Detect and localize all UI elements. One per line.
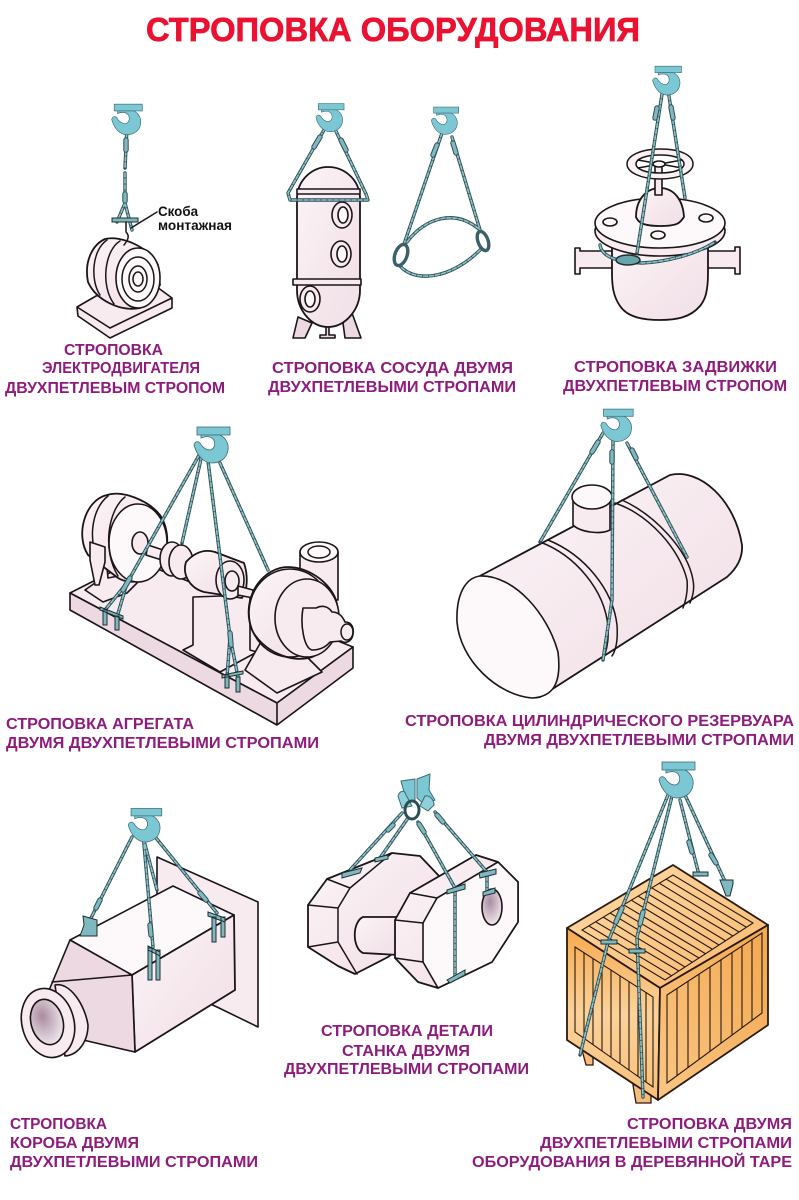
tank cylinder	[478, 474, 742, 698]
crate right face	[658, 925, 768, 1100]
caption: crate: ОБОРУДОВАНИЯ В ДЕРЕВЯННОЙ ТАРЕ	[472, 1153, 792, 1171]
icon: hook	[659, 762, 695, 798]
caption: duct box: ДВУХПЕТЛЕВЫМИ СТРОПАМИ	[10, 1154, 258, 1171]
icon: hook	[431, 107, 459, 134]
callout: shackle	[131, 204, 232, 233]
valve body	[612, 240, 708, 320]
sling on vessel	[288, 123, 368, 200]
caption: machine part: СТРОПОВКА ДЕТАЛИ	[321, 1023, 493, 1040]
valve bonnet	[636, 188, 684, 226]
front block	[395, 855, 518, 988]
figure: machine part	[308, 774, 518, 988]
mounting plate	[157, 857, 258, 1027]
motor	[82, 494, 167, 582]
callout: shackle: Скоба	[158, 204, 198, 219]
figure: wooden crate	[567, 762, 768, 1103]
valve side ports	[575, 247, 740, 274]
loose sling	[392, 133, 491, 276]
vessel ports	[300, 202, 352, 312]
icon: hook	[601, 409, 633, 442]
crate feet	[582, 1050, 651, 1103]
caption: crate: ДВУХПЕТЛЕВЫМИ СТРОПАМИ	[540, 1135, 792, 1152]
caption: motor	[5, 342, 225, 397]
pump housing	[249, 567, 339, 659]
caption: tank: ДВУМЯ ДВУХПЕТЛЕВЫМИ СТРОПАМИ	[484, 732, 794, 749]
caption: vessel	[268, 360, 516, 396]
caption: crate	[472, 1116, 792, 1171]
icon: hook	[194, 427, 230, 463]
caption: machine part	[284, 1023, 529, 1078]
caption: pump unit: ДВУМЯ ДВУХПЕТЛЕВЫМИ СТРОПАМИ	[6, 735, 319, 752]
motor body	[87, 238, 160, 309]
icon: hook	[128, 808, 162, 842]
caption: duct box: СТРОПОВКА	[10, 1116, 107, 1133]
slings	[100, 450, 268, 692]
rear slings	[680, 795, 733, 896]
caption: motor: ЭЛЕКТРОДВИГАТЕЛЯ	[42, 360, 200, 377]
icon: hook	[653, 66, 681, 95]
middle pedestal	[183, 595, 257, 672]
icon: double hook	[398, 774, 435, 819]
figure: valve	[575, 66, 740, 320]
slings	[342, 812, 496, 983]
tank bands	[540, 500, 694, 660]
figure: duct box	[14, 808, 258, 1064]
caption: tank	[405, 713, 794, 749]
caption: valve: СТРОПОВКА ЗАДВИЖКИ	[574, 359, 777, 376]
caption: valve	[563, 359, 787, 395]
caption: motor: ДВУХПЕТЛЕВЫМ СТРОПОМ	[5, 380, 225, 397]
motor base	[77, 287, 172, 338]
caption: machine part: СТАНКА ДВУМЯ	[342, 1043, 470, 1060]
icon: hook	[316, 104, 344, 132]
valve sling	[600, 88, 715, 265]
caption: valve: ДВУХПЕТЛЕВЫМ СТРОПОМ	[563, 378, 787, 395]
caption: pump unit: СТРОПОВКА АГРЕГАТА	[6, 716, 194, 733]
callout: shackle: монтажная	[158, 218, 232, 233]
pump nozzle	[300, 542, 338, 600]
figure: cylindrical tank	[457, 409, 742, 698]
figure: vessel with two slings	[288, 104, 491, 338]
front slings	[580, 788, 674, 1097]
vessel body	[297, 167, 360, 327]
caption: motor: СТРОПОВКА	[64, 342, 163, 359]
slings	[80, 833, 225, 980]
crate top	[567, 865, 768, 988]
block hole	[482, 889, 502, 925]
right pedestal	[245, 640, 322, 693]
crate left face	[567, 928, 660, 1100]
left pedestal block	[90, 542, 105, 585]
icon: hook	[112, 104, 142, 135]
caption: vessel: ДВУХПЕТЛЕВЫМИ СТРОПАМИ	[268, 379, 516, 396]
base slab	[70, 560, 353, 703]
connecting neck	[355, 917, 398, 955]
caption: duct box: КОРОБА ДВУМЯ	[10, 1135, 139, 1152]
left pedestal	[85, 545, 150, 602]
caption: machine part: ДВУХПЕТЛЕВЫМИ СТРОПАМИ	[284, 1061, 529, 1078]
caption: tank: СТРОПОВКА ЦИЛИНДРИЧЕСКОГО РЕЗЕРВУАРА	[405, 713, 794, 730]
bearing body	[185, 551, 247, 598]
figure: motor with one sling	[77, 104, 232, 338]
sling	[112, 127, 138, 245]
duct flange	[14, 982, 88, 1064]
slings	[540, 433, 687, 660]
rear block	[308, 853, 440, 974]
tank nozzle	[572, 485, 612, 532]
vessel legs	[293, 312, 361, 338]
pump shaft end	[302, 606, 353, 650]
title: СТРОПОВКА ОБОРУДОВАНИЯ	[146, 11, 640, 48]
box	[45, 886, 235, 1052]
caption: duct box	[10, 1116, 258, 1171]
handwheel	[627, 149, 693, 195]
valve flange	[595, 198, 725, 256]
figure: pump unit	[70, 427, 353, 725]
caption: crate: СТРОПОВКА ДВУМЯ	[627, 1116, 792, 1133]
motor front face	[116, 248, 160, 308]
shaft and couplings	[146, 542, 193, 579]
tank end	[457, 576, 559, 698]
caption: vessel: СТРОПОВКА СОСУДА ДВУМЯ	[272, 360, 513, 377]
caption: pump unit	[6, 716, 319, 752]
